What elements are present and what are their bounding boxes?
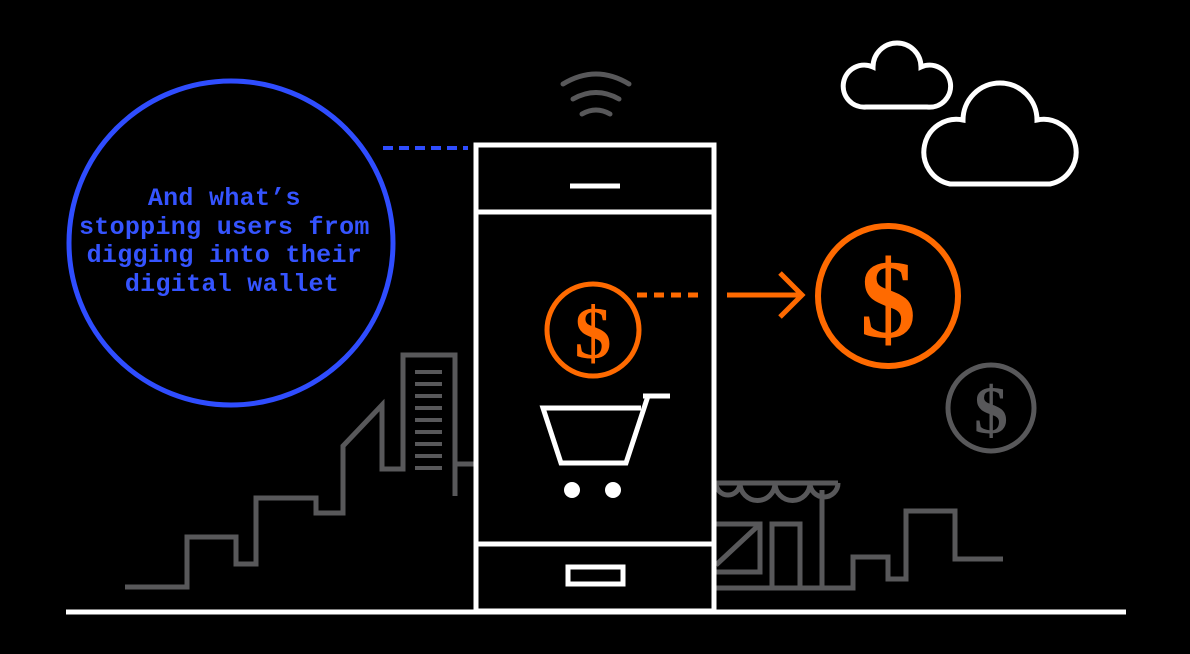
callout text: And what’s [148,184,301,213]
left skyline [125,355,474,587]
gray coin [948,365,1034,451]
clouds [843,43,1076,184]
callout text: digital wallet [125,270,339,299]
callout text: stopping users from [79,213,370,242]
phone [476,145,714,611]
small orange coin: $ [574,293,612,375]
small orange coin [547,284,639,376]
big orange coin: $ [860,238,916,362]
orange arrow [637,273,802,317]
callout text: digging into their [87,241,362,270]
gray coin: $ [974,372,1008,448]
wifi icon [563,74,629,114]
shopping cart [543,396,670,498]
blue circle callout [69,81,393,405]
right skyline with store [716,483,1003,588]
ground line [66,610,1126,614]
blue dashed connector [383,146,468,150]
big orange coin [818,226,958,366]
